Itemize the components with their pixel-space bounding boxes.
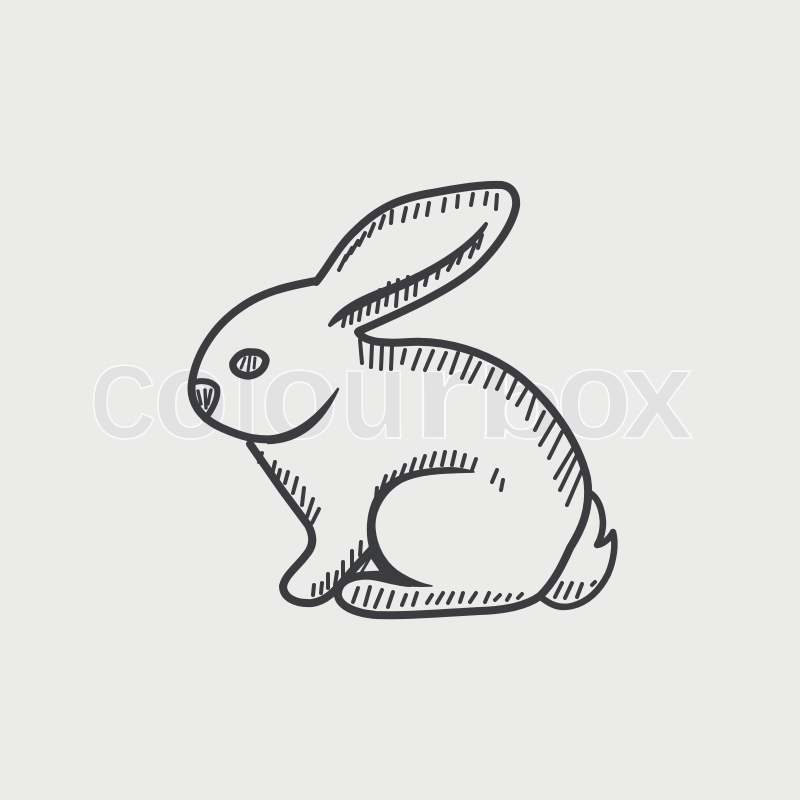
rabbit sketch — [192, 185, 614, 615]
mouth curve — [268, 389, 338, 443]
belly hatching — [353, 587, 522, 607]
watermark: Colourbox — [90, 324, 693, 465]
chest and front foot outline — [250, 444, 372, 603]
nose — [192, 381, 217, 419]
thigh hatching — [376, 452, 503, 498]
watermark: Colourbox: b — [476, 346, 564, 460]
leg triangle — [361, 556, 382, 573]
head outline — [192, 281, 316, 439]
inner ear fold — [330, 224, 486, 325]
watermark: Colourbox: l — [233, 346, 259, 460]
ear outline — [316, 185, 516, 331]
eye — [233, 352, 266, 376]
back and base outline — [338, 332, 588, 615]
watermark: Colourbox: o — [260, 324, 339, 465]
tail — [542, 493, 614, 607]
foot hatching — [313, 542, 361, 595]
back hatching — [360, 340, 582, 505]
watermark: Colourbox: o — [153, 324, 229, 465]
watermark: Colourbox: r — [412, 324, 474, 465]
ear hatching — [339, 193, 497, 326]
thigh arc — [368, 468, 474, 586]
watermark: Colourbox: C — [90, 345, 156, 461]
watermark: Colourbox: x — [622, 324, 693, 465]
watermark: Colourbox: u — [340, 324, 408, 465]
chest hatching — [259, 453, 319, 523]
watermark: Colourbox: o — [556, 324, 632, 465]
